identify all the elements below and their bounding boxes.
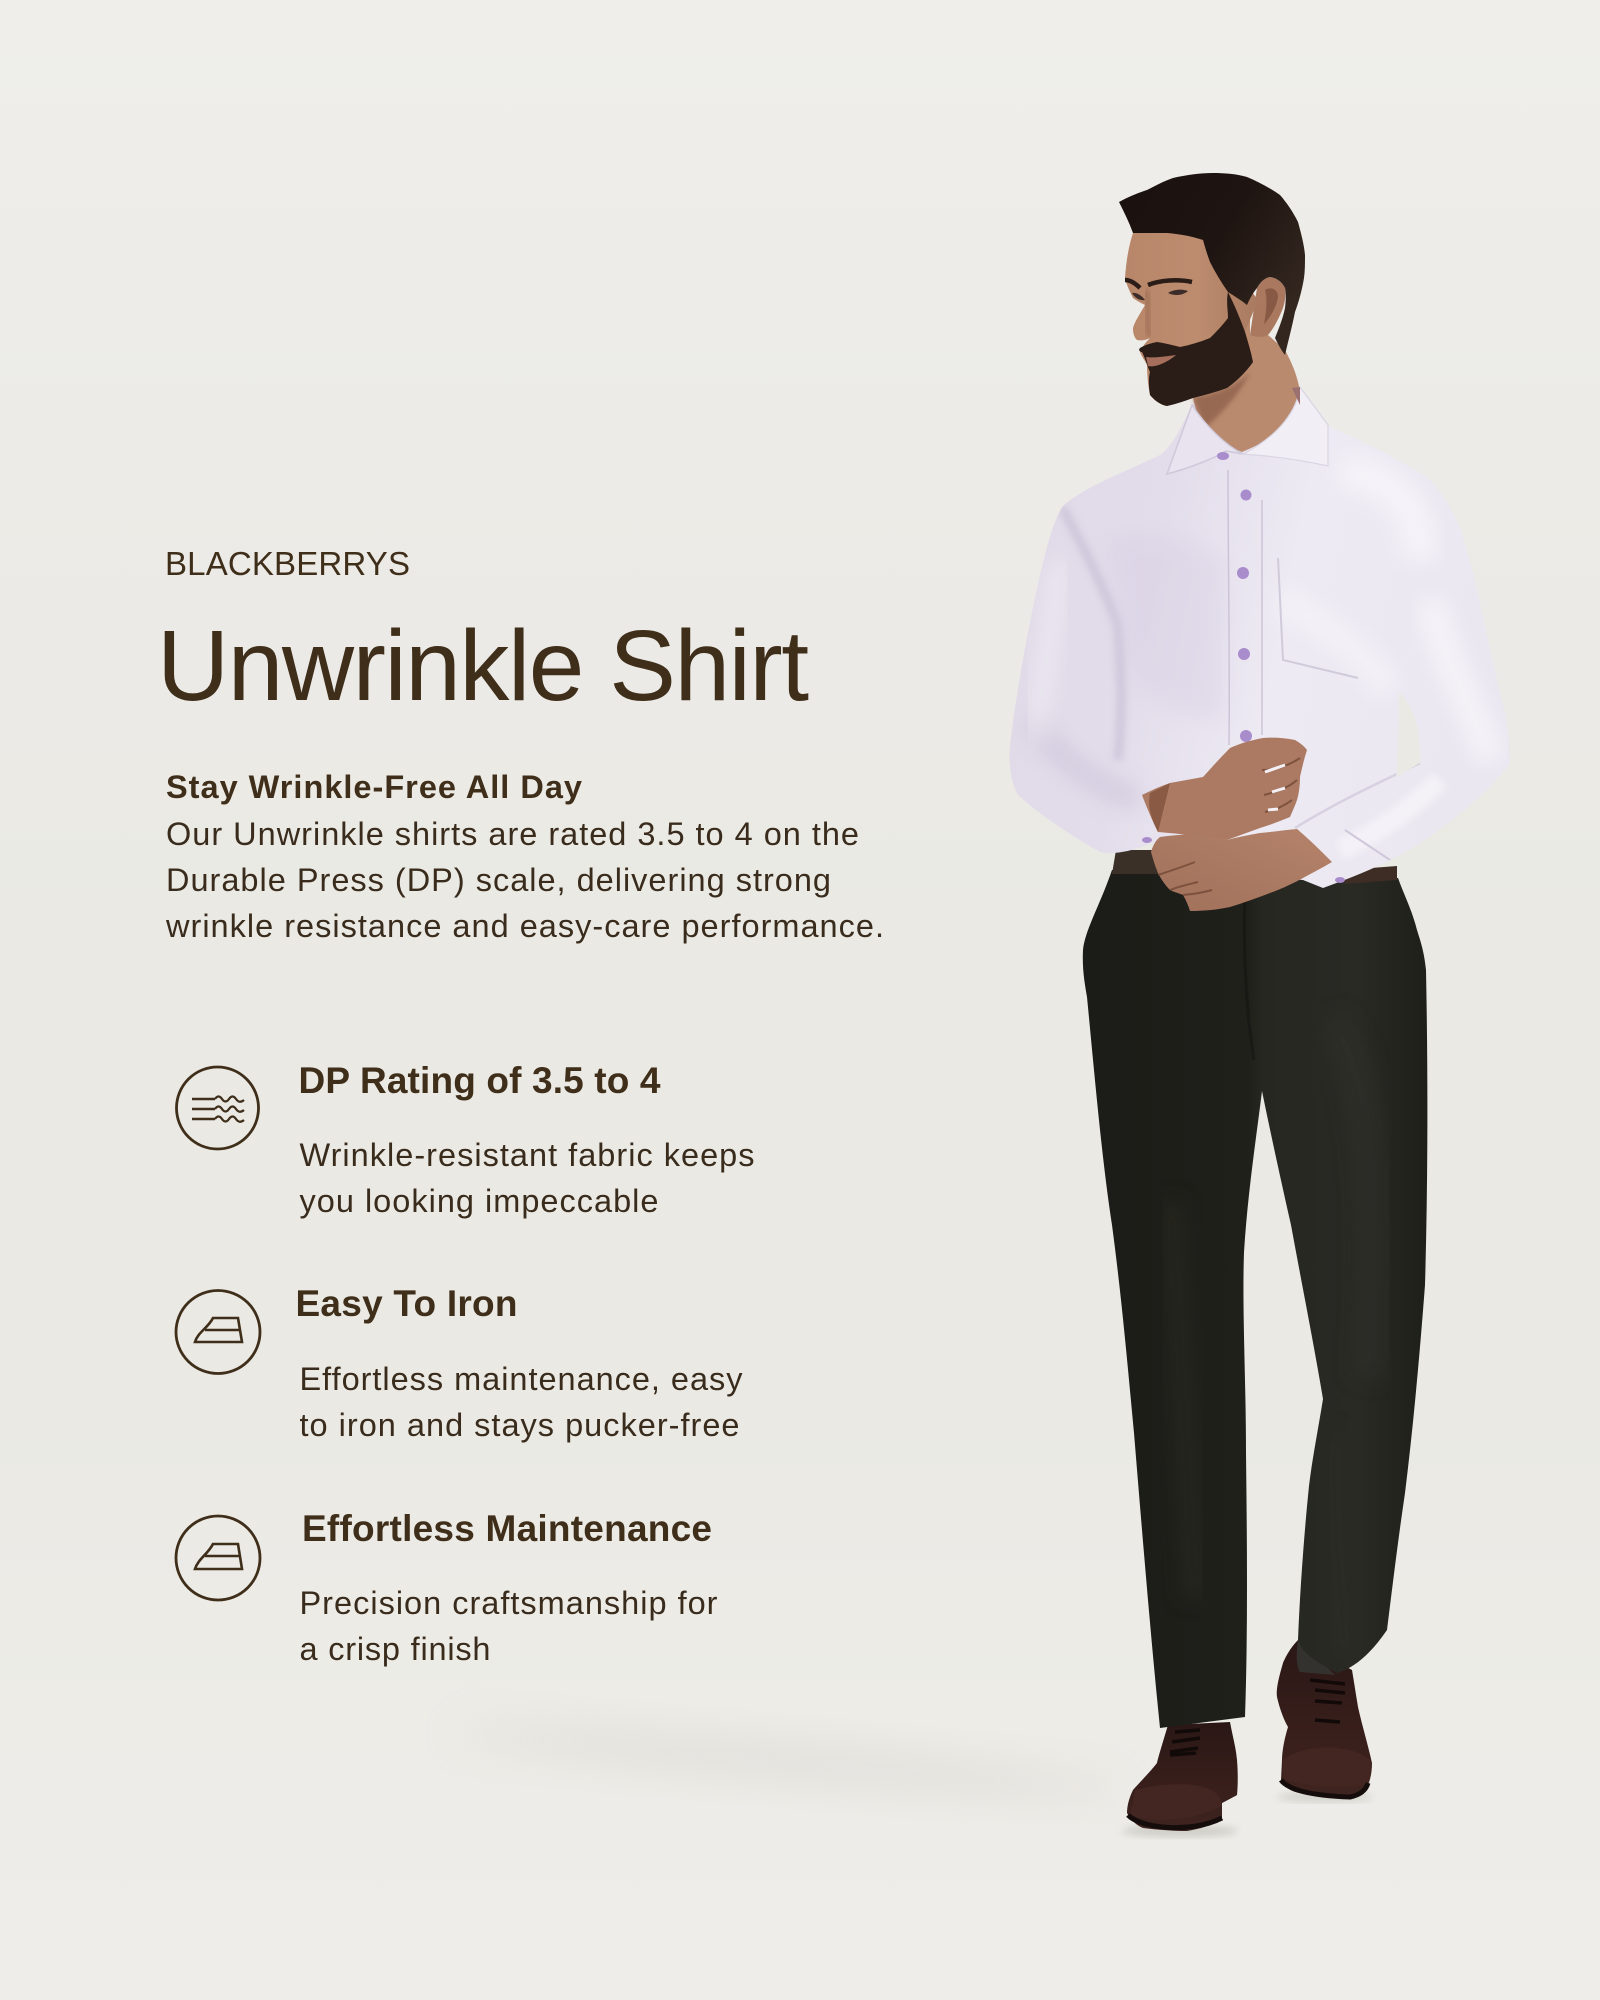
- beard: [1139, 292, 1253, 406]
- face: [1125, 232, 1258, 406]
- left shoe: [1127, 1722, 1238, 1831]
- eye and brow: [1125, 280, 1192, 288]
- icon: iron in circle: [176, 1516, 260, 1600]
- intro text block: [165, 769, 884, 944]
- floor shadow: [450, 1716, 1373, 1837]
- intro paragraph: Our Unwrinkle shirts are rated 3.5 to 4 on the: [166, 816, 859, 852]
- description: Precision craftsmanship for: [300, 1585, 718, 1621]
- hands: [1142, 738, 1332, 911]
- title: Unwrinkle Shirt: [157, 610, 809, 722]
- intro paragraph: Durable Press (DP) scale, delivering strong: [166, 862, 831, 898]
- head: [1119, 173, 1305, 406]
- feature: DP rating: [176, 1060, 754, 1219]
- model figure: [1009, 173, 1510, 1831]
- shirt placket: [1228, 470, 1262, 745]
- icon: fabric waves in circle: [176, 1067, 258, 1149]
- lower hand: [1151, 829, 1332, 911]
- heading: DP Rating of 3.5 to 4: [298, 1060, 661, 1101]
- shirt buttons: [1142, 490, 1345, 883]
- right shoe: [1277, 1640, 1372, 1797]
- gap between body and right sleeve: [1396, 692, 1421, 778]
- heading: Easy To Iron: [296, 1283, 518, 1324]
- shirt shading and folds: [1030, 470, 1490, 860]
- description: you looking impeccable: [300, 1183, 658, 1219]
- description: a crisp finish: [300, 1631, 490, 1667]
- trousers: [1083, 870, 1427, 1728]
- description: [300, 1585, 718, 1667]
- icon: iron in circle: [176, 1290, 260, 1374]
- description: to iron and stays pucker-free: [300, 1407, 740, 1443]
- description: [300, 1137, 754, 1219]
- neck: [1193, 292, 1300, 452]
- feature: effortless maintenance: [176, 1508, 718, 1667]
- ear: [1250, 277, 1285, 337]
- heading: Effortless Maintenance: [302, 1508, 712, 1549]
- belt: [1112, 850, 1397, 884]
- shirt: [1009, 387, 1510, 888]
- description: Effortless maintenance, easy: [300, 1361, 743, 1397]
- brand name: BLACKBERRYS: [165, 545, 410, 582]
- hair: [1119, 173, 1305, 355]
- lips: [1146, 355, 1176, 366]
- description: Wrinkle-resistant fabric keeps: [300, 1137, 754, 1173]
- intro heading: Stay Wrinkle-Free All Day: [166, 769, 582, 805]
- intro paragraph: [165, 816, 884, 944]
- finger lines: [1158, 758, 1300, 895]
- shirt pocket: [1278, 558, 1358, 678]
- feature: easy to iron: [176, 1283, 743, 1443]
- upper hand: [1142, 738, 1307, 840]
- collar: [1167, 387, 1328, 474]
- description: [300, 1361, 743, 1443]
- face shadow: [1146, 290, 1150, 336]
- intro paragraph: wrinkle resistance and easy-care performance.: [165, 908, 884, 944]
